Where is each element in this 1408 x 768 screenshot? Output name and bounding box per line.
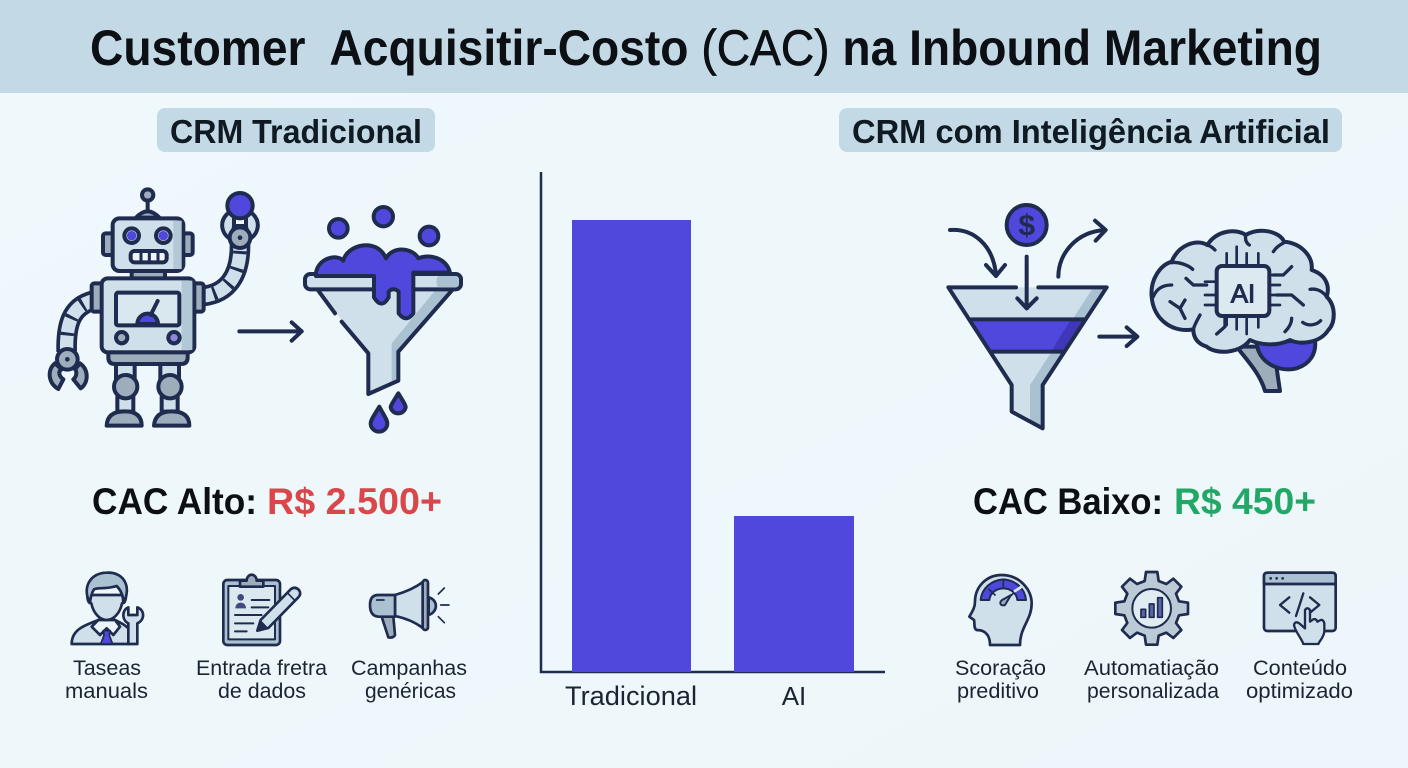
label: Conteúdo optimizado: optimizado [1246, 679, 1353, 703]
label: Campanhas genéricas [351, 656, 467, 703]
title: Customer Acquisitir-Costo (CAC) na Inbound Marketing [90, 20, 1322, 76]
header band with title [0, 0, 1408, 93]
label: Entrada fretra de dados: Entrada fretra [196, 656, 327, 680]
label: Campanhas genéricas: Campanhas [351, 656, 467, 680]
label: Campanhas genéricas: genéricas [365, 679, 456, 703]
label: Entrada fretra de dados [196, 656, 327, 703]
icon: person with wrench [72, 573, 143, 644]
axis label: Tradicional: Tradicional [565, 681, 697, 711]
label: Automatiação personalizada [1084, 656, 1219, 703]
arrow: robot to leaky funnel [239, 322, 302, 341]
label: Conteúdo optimizado [1246, 656, 1353, 703]
bar: Tradicional [572, 220, 691, 672]
label: Taseas manuals: manuals [65, 679, 148, 703]
icon: AI brain: AI [1231, 278, 1255, 308]
icon: gear with bar chart [1115, 572, 1188, 645]
label: Automatiação personalizada: personalizada [1087, 679, 1219, 703]
icon: AI funnel with coin and arrows: $ [1018, 210, 1035, 243]
icon: AI funnel with coin and arrows [948, 205, 1107, 428]
heading: CRM com Inteligência Artificial: CRM com Inteligência Artificial [852, 113, 1330, 150]
axis label: AI: AI [782, 681, 806, 711]
label: Taseas manuals [65, 656, 148, 703]
CAC alto value: CAC Alto: [92, 481, 257, 522]
icon: clipboard with pencil [223, 575, 300, 645]
CAC baixo value: CAC Baixo: [973, 481, 1163, 522]
CAC alto value: R$ 2.500+ [267, 481, 442, 522]
CAC baixo value: R$ 450+ [1174, 481, 1316, 522]
label: Scoração preditivo: preditivo [957, 679, 1039, 703]
label: Automatiação personalizada: Automatiação [1084, 656, 1219, 680]
icon: head with gauge [969, 575, 1032, 645]
icon: code window with hand [1264, 573, 1336, 644]
icon: leaky funnel [305, 207, 461, 432]
bar chart [541, 172, 885, 711]
label: Entrada fretra de dados: de dados [218, 679, 306, 703]
bar: AI [734, 516, 854, 672]
heading: CRM Tradicional: CRM Tradicional [170, 113, 422, 150]
arrow: funnel to AI brain [1099, 327, 1137, 346]
label: Taseas manuals: Taseas [73, 656, 141, 680]
label: Scoração preditivo [955, 656, 1046, 703]
label: Scoração preditivo: Scoração [955, 656, 1046, 680]
label: Conteúdo optimizado: Conteúdo [1253, 656, 1347, 680]
icon: megaphone [370, 580, 449, 638]
icon: robot [50, 189, 258, 426]
icon: AI brain [1151, 231, 1334, 391]
